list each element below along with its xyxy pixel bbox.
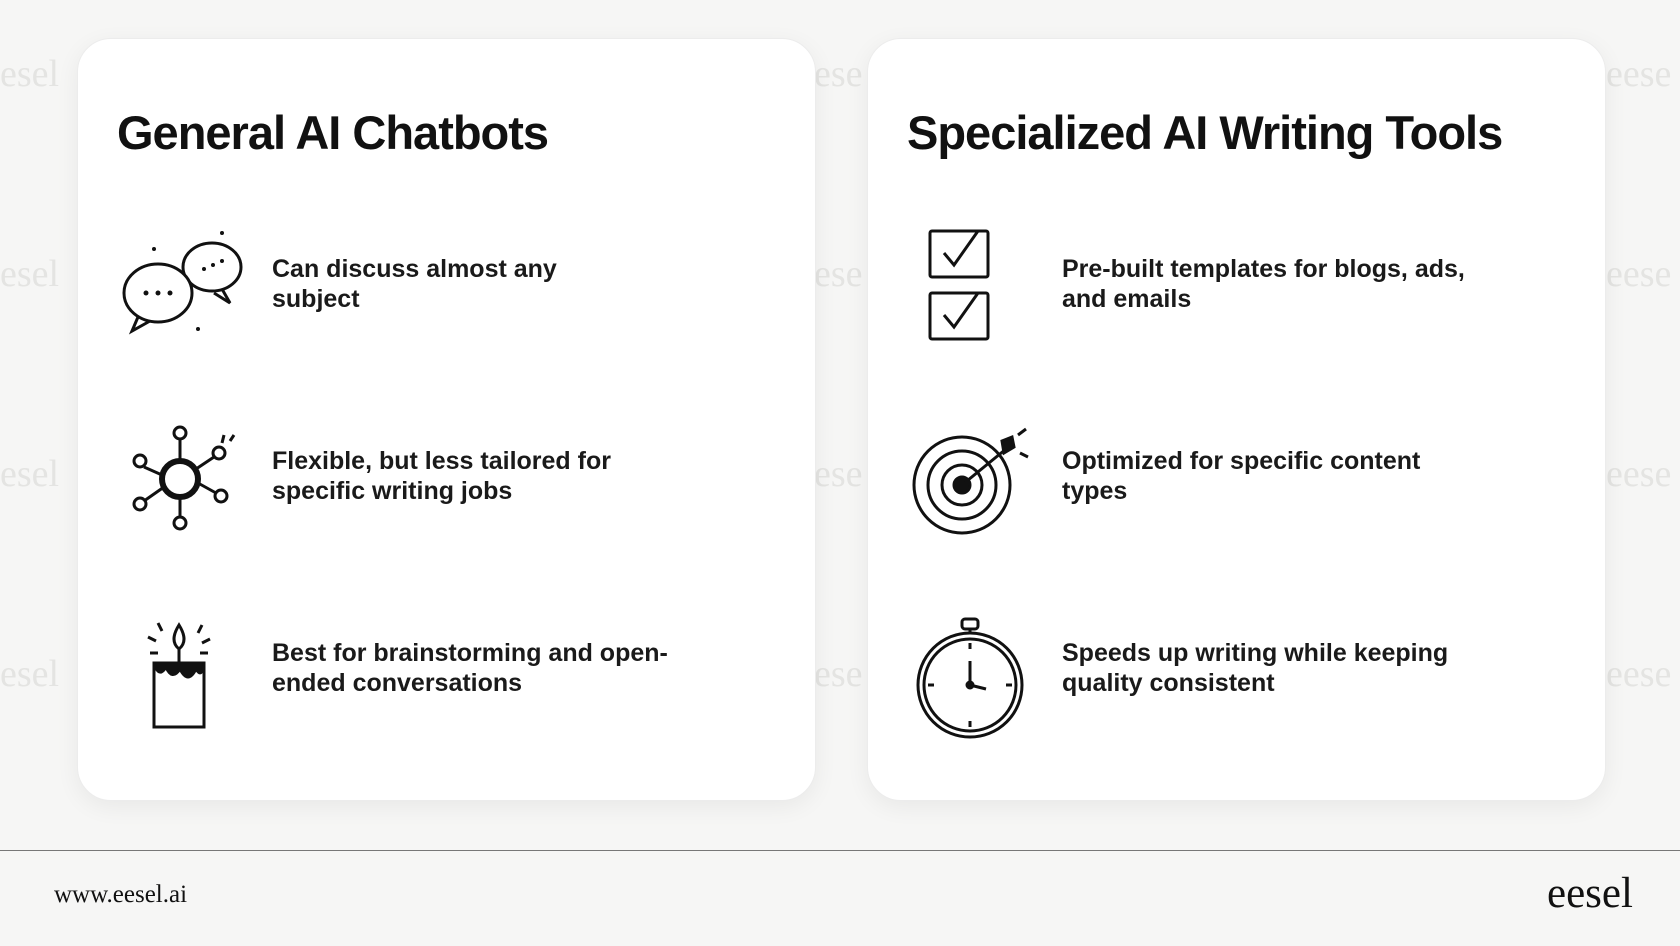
- text: subject: [272, 285, 360, 313]
- item: discuss any subject: [122, 231, 557, 334]
- text: Pre-built templates for blogs, ads,: [1062, 255, 1465, 283]
- item: brainstorming: [147, 622, 668, 728]
- text: ese: [814, 453, 863, 495]
- text: Best for brainstorming and open-: [272, 639, 668, 667]
- text: esel: [0, 253, 59, 295]
- text: [1062, 447, 1420, 505]
- icon: stopwatch: [916, 618, 1024, 738]
- heading: Specialized AI Writing Tools: [907, 106, 1502, 159]
- panel: general AI chatbots: [77, 38, 816, 801]
- text: [1062, 639, 1448, 697]
- text: specific writing jobs: [272, 477, 512, 505]
- text: esel: [0, 53, 59, 95]
- icon: chat bubbles: [122, 231, 242, 334]
- text: eese: [1606, 253, 1671, 295]
- text: esel: [0, 453, 59, 495]
- item: optimized: [912, 428, 1420, 534]
- text: eese: [1606, 653, 1671, 695]
- icon: checklist: [928, 230, 990, 340]
- text: Flexible, but less tailored for: [272, 447, 611, 475]
- text: Optimized for specific content: [1062, 447, 1420, 475]
- text: [272, 447, 611, 505]
- text: types: [1062, 477, 1127, 505]
- footer logo: eesel: [1547, 870, 1633, 917]
- text: quality consistent: [1062, 669, 1275, 697]
- item: flexible: [132, 426, 611, 530]
- text: esel: [0, 653, 59, 695]
- text: Speeds up writing while keeping: [1062, 639, 1448, 667]
- text: eese: [1606, 53, 1671, 95]
- text: eese: [1606, 453, 1671, 495]
- text: [272, 255, 557, 313]
- footer url: www.eesel.ai: [54, 881, 187, 908]
- text: ese: [814, 253, 863, 295]
- icon: target: [912, 428, 1029, 534]
- text: Can discuss almost any: [272, 255, 557, 283]
- item: speeds up: [916, 618, 1448, 738]
- text: ese: [814, 653, 863, 695]
- text: [272, 639, 668, 697]
- panel: specialized AI writing tools: [867, 38, 1606, 801]
- text: and emails: [1062, 285, 1191, 313]
- text: [1062, 255, 1465, 313]
- icon: network hub: [132, 426, 236, 530]
- text: ended conversations: [272, 669, 522, 697]
- item: templates: [928, 230, 1465, 340]
- text: ese: [814, 53, 863, 95]
- heading: General AI Chatbots: [117, 106, 548, 159]
- icon: candle: [147, 622, 211, 728]
- footer: [0, 850, 1680, 946]
